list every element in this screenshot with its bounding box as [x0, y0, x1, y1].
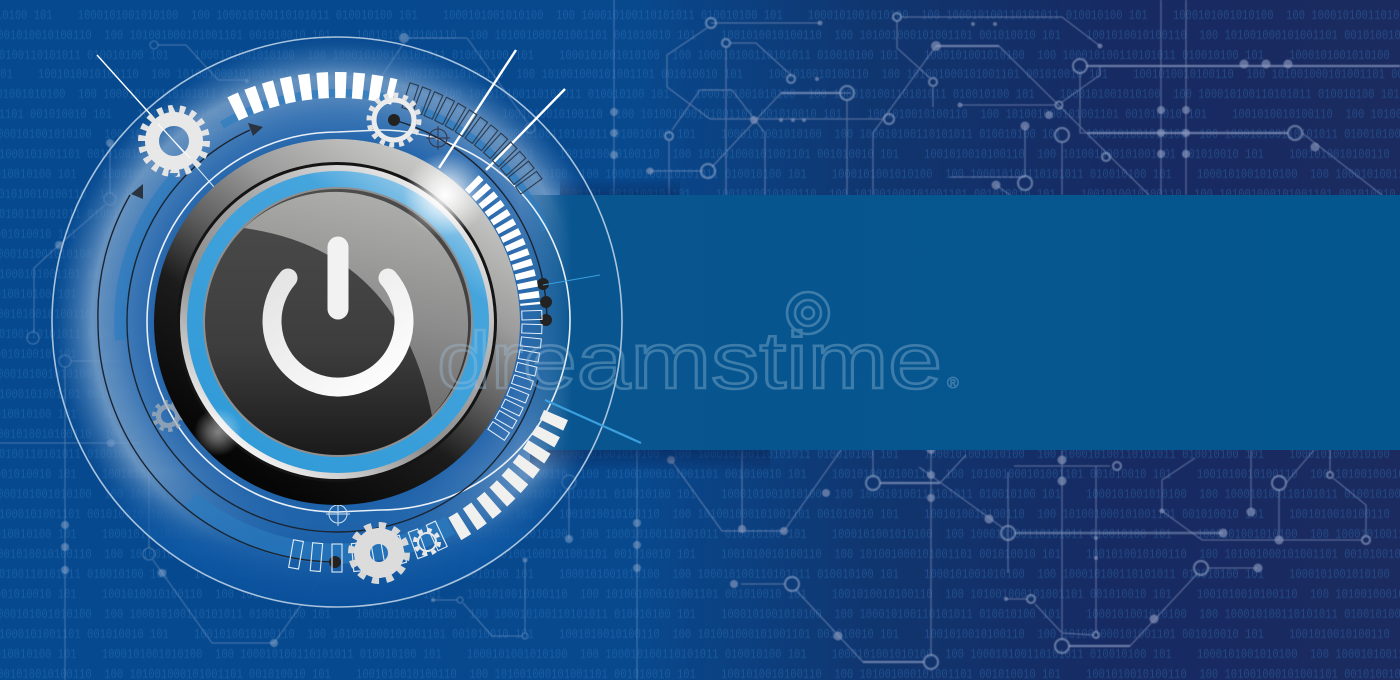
icon: top gear	[369, 95, 419, 145]
crosshair marks	[326, 126, 450, 526]
silver ring	[180, 165, 494, 479]
solid ticks lower right	[452, 415, 556, 530]
outer thin ring	[52, 37, 622, 607]
circuit lines top right	[646, 0, 1400, 195]
highlight top right	[403, 153, 487, 237]
button dark rim line	[177, 162, 497, 482]
icon: power symbol	[272, 247, 404, 387]
banner shadows	[530, 178, 770, 472]
outlined dark ticks top right	[402, 83, 542, 194]
watermark: ®	[947, 375, 959, 392]
banner	[520, 195, 1400, 450]
binary code pattern: 1000101001010100 100 100010100110101011 010010100 101 1000101001010100 100 100010100110101011 010010100 101	[0, 247, 721, 263]
inner white ring	[147, 130, 570, 512]
binary code pattern: 1000101001010100 100 100010100110101011 010010100 101 1000101001010100 100 100010100110101011 010010100 101	[0, 367, 721, 383]
blue ring	[187, 171, 489, 473]
button face	[205, 189, 471, 455]
watermark	[437, 292, 959, 405]
outlined white ticks bottom	[289, 521, 447, 572]
outlined white ticks right	[488, 310, 542, 440]
highlight lower left	[194, 408, 242, 456]
circuit lines bottom right	[667, 446, 1370, 669]
solid ticks right	[472, 182, 530, 305]
glow halo	[58, 44, 580, 606]
binary code pattern: 1001010010100110 100 101001000101001101 001010010 101 1001010010100110 100 101001000101001101 001010010 101	[0, 427, 721, 443]
power button	[154, 139, 520, 505]
icon: bottom gear	[352, 526, 406, 580]
binary code pattern: 1001010010100110 100 101001000101001101 001010010 101 1001010010100110 100 101001000101001101 001010010 101	[0, 307, 721, 323]
dark arcs with arrows	[98, 114, 552, 568]
inner bevel	[203, 187, 473, 457]
icon: large gear	[142, 109, 206, 173]
watermark: dreamstime	[437, 316, 942, 405]
solid ticks top	[233, 85, 394, 109]
circuit lines left	[0, 0, 641, 680]
blue accent arcs	[121, 93, 546, 554]
button outer rim	[154, 139, 520, 505]
icon: small outline gear	[415, 530, 439, 554]
face gloss	[244, 192, 468, 416]
spike lines	[97, 50, 641, 443]
icon: left faded gear	[154, 402, 182, 430]
